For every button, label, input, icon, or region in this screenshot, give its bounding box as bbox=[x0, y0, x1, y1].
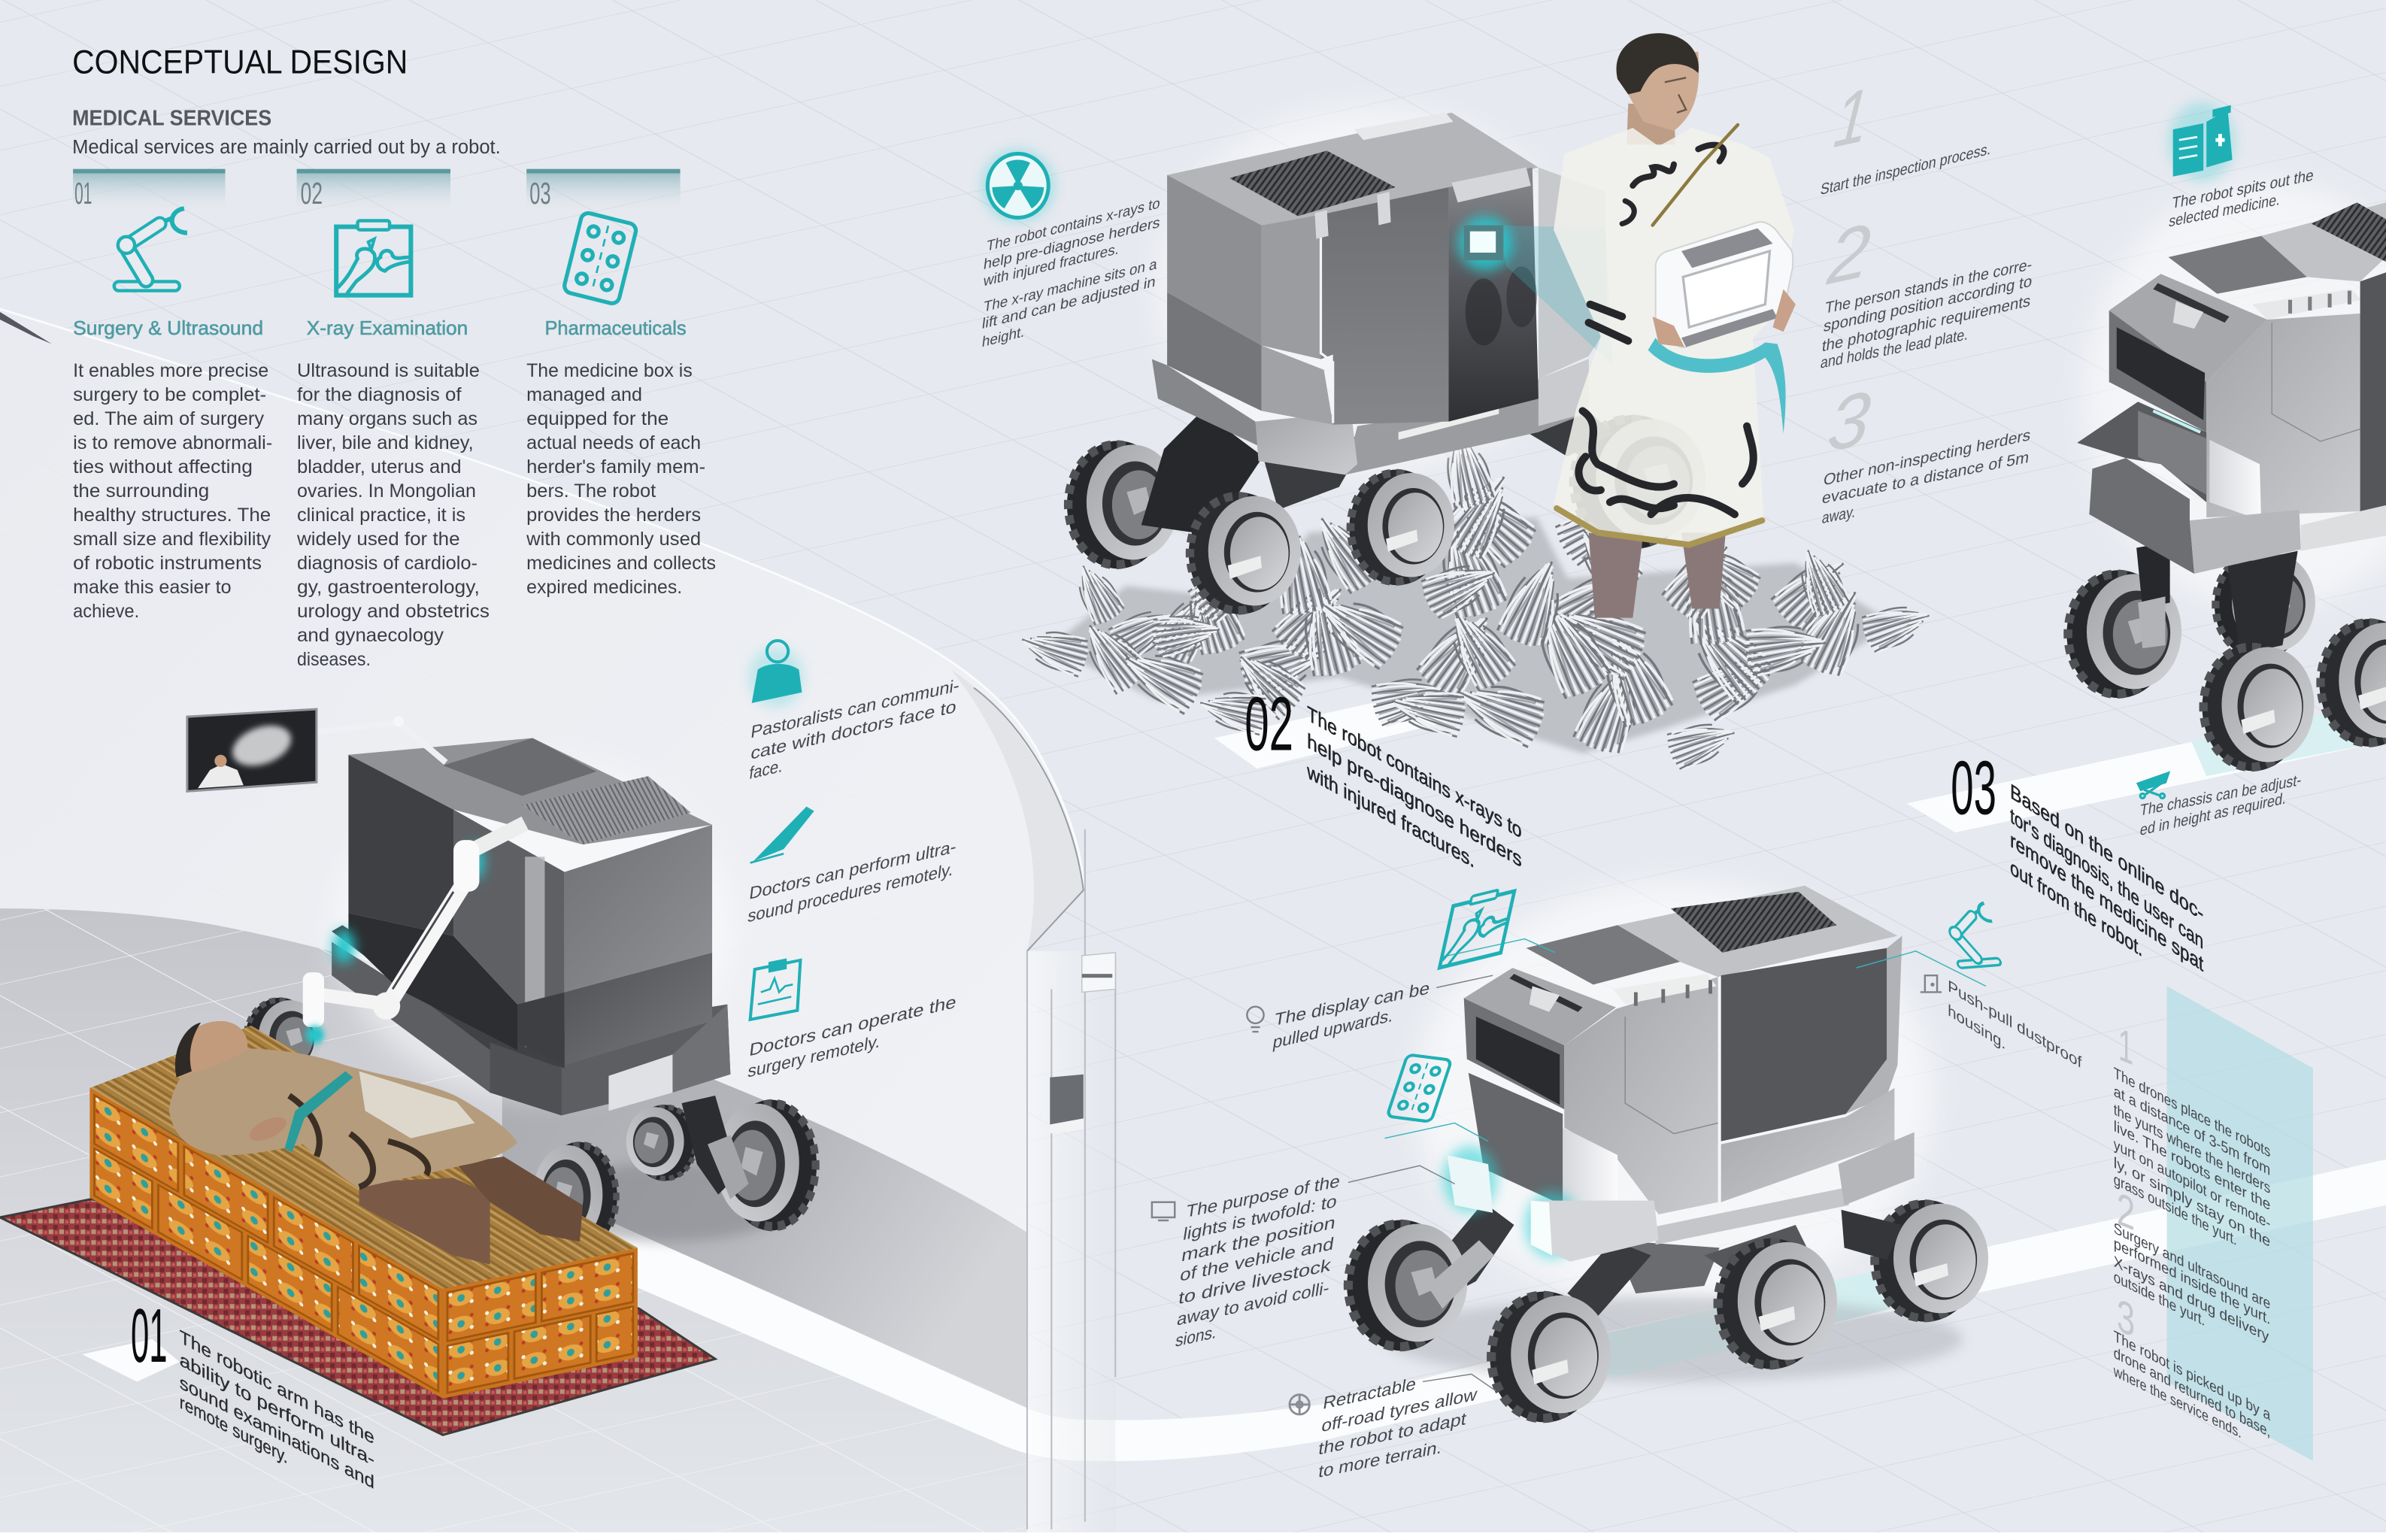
text block: x-ray: diseases. bbox=[297, 649, 371, 670]
chassis bbox=[1152, 359, 1589, 474]
number bar 01 bbox=[73, 169, 225, 213]
numeral 3: 3 bbox=[2117, 1290, 2135, 1348]
text block: pharmaceuticals: expired medicines. bbox=[526, 577, 682, 598]
text block: surgery: small size and flexibility bbox=[73, 529, 271, 550]
note: ultrasound remotely: sound procedures remotely. bbox=[747, 860, 954, 926]
patient bbox=[169, 1021, 583, 1265]
note: chassis height: ed in height as required. bbox=[2139, 789, 2287, 839]
service step 2: Surgery and ultrasound are bbox=[2114, 1219, 2270, 1313]
title: CONCEPTUAL DESIGN bbox=[72, 44, 408, 81]
x-ray glow and beam bbox=[1458, 216, 1613, 365]
icon: medicine bottles bbox=[2169, 102, 2236, 181]
step 03 description: Based on the online doc- bbox=[2010, 780, 2203, 926]
step 02 numeral: 02 bbox=[1245, 682, 1293, 767]
note: lights: The purpose of the bbox=[1184, 1172, 1342, 1222]
step 03 description: tor's diagnosis, the user can bbox=[2010, 804, 2203, 954]
note: x-ray function: height. bbox=[981, 324, 1026, 350]
icon: radiation bbox=[981, 149, 1054, 223]
text block: surgery: ed. The aim of surgery bbox=[73, 408, 265, 429]
step 03 description: out from the robot. bbox=[2010, 856, 2142, 962]
service step 1: at a distance of 3-5m from bbox=[2114, 1082, 2270, 1179]
bed left face bbox=[89, 1088, 443, 1399]
body bbox=[348, 738, 712, 1066]
service step 1: grass outside the yurt. bbox=[2114, 1171, 2237, 1249]
robot 4: exterior detail robot bbox=[1347, 883, 1988, 1423]
teal tint on path under robot bbox=[1567, 1250, 1963, 1378]
panel: teal glass service steps bbox=[2113, 986, 2313, 1461]
body bbox=[1167, 113, 1607, 425]
lead plate bbox=[1656, 222, 1793, 347]
step 01 description: sound examinations and bbox=[180, 1372, 374, 1493]
wheels and struts bbox=[1347, 1200, 1988, 1423]
note: communicate with doctors bbox=[748, 676, 960, 784]
glass sheet bbox=[2167, 986, 2313, 1461]
note: lights: lights is twofold: to bbox=[1181, 1192, 1339, 1244]
carpet bbox=[0, 1199, 715, 1435]
dome interior bbox=[0, 309, 1084, 1532]
text block: surgery: healthy structures. The bbox=[73, 505, 271, 526]
grass patch around robot 2 bbox=[1017, 429, 1935, 772]
number bar 02: 02 bbox=[301, 176, 323, 211]
icon: pill blister bbox=[563, 211, 638, 305]
service step 1: ly, or simply stay on the bbox=[2114, 1153, 2270, 1250]
note: x-ray function bbox=[981, 196, 1161, 350]
note: lights: of the vehicle and bbox=[1178, 1235, 1335, 1286]
text block: x-ray: many organs such as bbox=[297, 408, 478, 429]
text block: pharmaceuticals: herder's family mem- bbox=[526, 456, 705, 477]
service step 1: yurt on autopilot or remote- bbox=[2114, 1135, 2270, 1232]
step 01 description: The robotic arm has the bbox=[180, 1326, 374, 1448]
text block: x-ray: widely used for the bbox=[296, 529, 460, 550]
wheels and struts bbox=[1067, 411, 1705, 614]
text block: pharmaceuticals bbox=[526, 360, 716, 598]
text block: surgery: ties without affecting bbox=[73, 456, 253, 477]
heading: x-ray: X-ray Examination bbox=[307, 318, 468, 339]
note: x-ray function: lift and can be adjusted in bbox=[981, 274, 1157, 332]
service step 2: outside the yurt. bbox=[2114, 1268, 2205, 1329]
note: spits medicine: The robot spits out the bbox=[2171, 166, 2315, 212]
step note 1: Start the inspection process. bbox=[1820, 139, 1992, 199]
number bar 01: 01 bbox=[74, 176, 92, 211]
robot 4 feature notes bbox=[1152, 886, 2082, 1482]
bumpers with teal lights bbox=[1442, 1132, 1915, 1262]
wheels bbox=[245, 998, 817, 1251]
text block: pharmaceuticals: The medicine box is bbox=[526, 360, 693, 381]
wheels and struts bbox=[2066, 541, 2386, 771]
text block: x-ray: and gynaecology bbox=[297, 625, 444, 646]
text block: x-ray: Ultrasound is suitable bbox=[297, 360, 480, 381]
service step 2: performed inside the yurt. bbox=[2114, 1234, 2270, 1328]
person holding lead plate bbox=[1554, 33, 1796, 618]
note: chassis height: The chassis can be adjust- bbox=[2139, 771, 2303, 820]
chassis bbox=[332, 925, 730, 1115]
panel: pharmaceuticals bbox=[526, 169, 716, 598]
step note 3 bbox=[1821, 425, 2032, 527]
hands bbox=[1653, 290, 1796, 347]
note: display: The display can be bbox=[1273, 979, 1431, 1030]
note: communicate with doctors: Pastoralists can communi- bbox=[750, 676, 960, 742]
note: lights: mark the position bbox=[1180, 1213, 1337, 1266]
robot 3: medicine robot bbox=[2066, 183, 2386, 771]
robot 1 feature notes: 01 bbox=[131, 1293, 168, 1378]
text block: surgery: make this easier to bbox=[73, 577, 232, 598]
note: x-ray function: with injured fractures. bbox=[982, 241, 1120, 290]
teal glow on body bbox=[333, 929, 354, 963]
step 01 description: remote surgery. bbox=[180, 1392, 287, 1468]
note: display: pulled upwards. bbox=[1272, 1006, 1395, 1053]
note: ultrasound remotely: Doctors can perform ultra- bbox=[748, 838, 957, 904]
note: lights: to drive livestock bbox=[1177, 1256, 1332, 1308]
icon: pill blister small bbox=[1387, 1054, 1451, 1122]
step note 2: the photographic requirements bbox=[1821, 291, 2032, 355]
step 02 description: The robot contains x-rays to bbox=[1307, 702, 1522, 844]
note: tyres bbox=[1317, 1375, 1479, 1482]
robotic arm bbox=[303, 823, 525, 1044]
step 03 numeral: 03 bbox=[1951, 746, 1996, 831]
intro sentence: Medical services are mainly carried out by a robot. bbox=[72, 137, 501, 158]
text block: surgery bbox=[73, 360, 272, 622]
text block: x-ray: ovaries. In Mongolian bbox=[297, 480, 476, 502]
robe bbox=[1554, 128, 1794, 547]
glass wall of dome bbox=[1027, 829, 1115, 1532]
step 01 description: ability to perform ultra- bbox=[180, 1350, 374, 1471]
text block: x-ray: for the diagnosis of bbox=[297, 384, 462, 405]
subtitle: MEDICAL SERVICES bbox=[72, 107, 271, 131]
step note 2 bbox=[1820, 255, 2033, 372]
text block: x-ray: diagnosis of cardiolo- bbox=[297, 553, 478, 574]
text block: x-ray: liver, bile and kidney, bbox=[297, 432, 474, 453]
bed right face bbox=[443, 1247, 638, 1399]
note: spits medicine bbox=[2168, 166, 2315, 231]
note: tyres: to more terrain. bbox=[1317, 1438, 1443, 1482]
step note 2: and holds the lead plate. bbox=[1820, 326, 1969, 372]
text block: surgery: surgery to be complet- bbox=[73, 384, 266, 405]
numeral 2: 2 bbox=[2117, 1183, 2135, 1241]
text block: pharmaceuticals: bers. The robot bbox=[526, 480, 656, 502]
note: surgery remotely: Doctors can operate the bbox=[748, 993, 957, 1060]
step numeral 1: 1 bbox=[1830, 71, 1872, 164]
note: lights: sions. bbox=[1174, 1323, 1218, 1351]
note: tyres: Retractable bbox=[1322, 1375, 1417, 1414]
white floor path band bbox=[601, 1160, 2386, 1461]
icon: doctor bbox=[749, 641, 803, 708]
step numeral 3: 3 bbox=[1824, 374, 1874, 468]
text block: x-ray: clinical practice, it is bbox=[297, 505, 465, 526]
step numeral 2: 2 bbox=[1824, 207, 1874, 301]
icon: x-ray film small bbox=[1439, 886, 1516, 968]
note: dustproof housing: housing. bbox=[1948, 1000, 2006, 1053]
robe patterns bbox=[1557, 125, 1781, 545]
text block: pharmaceuticals: managed and bbox=[526, 384, 642, 405]
note: lights bbox=[1174, 1172, 1342, 1351]
service step 3: The robot is picked up by a bbox=[2114, 1327, 2270, 1424]
robot 2 feature notes bbox=[981, 71, 2033, 873]
text block: surgery: is to remove abnormali- bbox=[73, 432, 272, 453]
medicine hopper bbox=[2077, 402, 2206, 502]
icon: light bulb bbox=[1247, 1007, 1264, 1032]
number bar 02 bbox=[297, 169, 450, 213]
note: surgery remotely bbox=[747, 993, 957, 1082]
service step 3: where the service ends. bbox=[2113, 1362, 2242, 1441]
text block: pharmaceuticals: actual needs of each bbox=[526, 432, 701, 453]
service step 1: The drones place the robots bbox=[2114, 1064, 2270, 1161]
bed and carpet with patient bbox=[0, 1021, 715, 1435]
step 02 description: help pre-diagnose herders bbox=[1307, 729, 1522, 872]
text block: x-ray: urology and obstetrics bbox=[297, 601, 490, 622]
text block: surgery: It enables more precise bbox=[73, 360, 268, 381]
icon: door bbox=[1921, 975, 1942, 992]
teal sash bbox=[1648, 338, 1786, 434]
note: communicate with doctors: face. bbox=[748, 756, 784, 784]
service step 1: live. The robots enter the bbox=[2114, 1117, 2270, 1214]
panel: x-ray examination bbox=[296, 169, 490, 670]
service step 3: drone and returned to base, bbox=[2114, 1344, 2270, 1441]
heading: pharmaceuticals: Pharmaceuticals bbox=[544, 318, 687, 339]
robot 2: x-ray robot bbox=[1067, 107, 1705, 614]
text block: x-ray bbox=[296, 360, 490, 670]
grey floor disc bbox=[0, 908, 1027, 1532]
service step 1: the yurts where the herders bbox=[2114, 1100, 2270, 1197]
step note 3: away. bbox=[1821, 503, 1857, 527]
text block: surgery: the surrounding bbox=[73, 480, 209, 502]
numeral 1: 1 bbox=[2118, 1019, 2133, 1075]
heading: surgery: Surgery & Ultrasound bbox=[73, 318, 263, 339]
text block: pharmaceuticals: with commonly used bbox=[526, 529, 701, 550]
legs bbox=[1589, 532, 1726, 618]
robot 1 feature notes bbox=[131, 641, 960, 1493]
number bar 03: 03 bbox=[529, 176, 551, 211]
neck and face bbox=[1627, 52, 1699, 144]
service step 2: X-rays and drug delivery bbox=[2114, 1253, 2269, 1346]
leader lines bbox=[1348, 939, 1986, 1391]
hair bbox=[1617, 33, 1699, 95]
text block: pharmaceuticals: provides the herders bbox=[526, 505, 701, 526]
number bar 03 bbox=[526, 169, 681, 213]
step note 2: The person stands in the corre- bbox=[1824, 255, 2033, 317]
icon: robot arm small bbox=[1939, 903, 2006, 968]
step note 2: sponding position according to bbox=[1823, 271, 2033, 335]
step 02 description: with injured fractures. bbox=[1306, 759, 1475, 873]
text block: pharmaceuticals: medicines and collects bbox=[526, 553, 716, 574]
icon: scalpel bbox=[750, 807, 814, 862]
note: x-ray function: The x-ray machine sits on a bbox=[983, 256, 1159, 316]
note: lights: away to avoid colli- bbox=[1175, 1278, 1331, 1330]
step 03 description: remove the medicine spat bbox=[2010, 829, 2204, 977]
chassis beam bbox=[1656, 1187, 1849, 1244]
note: x-ray function: The robot contains x-rays to bbox=[986, 196, 1161, 255]
robot 1: surgery robot bbox=[187, 709, 817, 1251]
bumper bbox=[2089, 458, 2386, 574]
body bbox=[2109, 202, 2386, 520]
text block: pharmaceuticals: equipped for the bbox=[526, 408, 669, 429]
body bbox=[1464, 886, 1902, 1214]
text block: x-ray: gy, gastroenterology, bbox=[297, 577, 480, 598]
step note 3: evacuate to a distance of 5m bbox=[1821, 448, 2030, 508]
icon: clipboard bbox=[750, 960, 800, 1020]
note: spits medicine: selected medicine. bbox=[2168, 190, 2281, 231]
monitor with ultrasound scan bbox=[187, 709, 446, 791]
note: x-ray function: help pre-diagnose herders bbox=[983, 214, 1161, 273]
icon: x-ray film bbox=[336, 220, 411, 296]
icon: tyre bbox=[1290, 1395, 1309, 1414]
heading block bbox=[72, 44, 501, 158]
text block: surgery: of robotic instruments bbox=[73, 553, 262, 574]
white label strips bbox=[82, 684, 2386, 1381]
text block: surgery: achieve. bbox=[73, 601, 139, 622]
note: tyres: off-road tyres allow bbox=[1320, 1385, 1479, 1436]
service step 1 bbox=[2114, 1064, 2270, 1250]
note: display bbox=[1272, 979, 1431, 1053]
robot 3 feature notes bbox=[1951, 102, 2315, 977]
step note 3: Other non-inspecting herders bbox=[1823, 425, 2032, 490]
bed top bbox=[89, 1026, 638, 1289]
text block: x-ray: bladder, uterus and bbox=[297, 456, 462, 477]
note: communicate with doctors: cate with doctors face to bbox=[750, 697, 957, 764]
panel: surgery and ultrasound bbox=[73, 169, 272, 622]
note: dustproof housing: Push-pull dustproof bbox=[1948, 976, 2082, 1072]
icon: stretcher bbox=[2138, 773, 2169, 798]
note: surgery remotely: surgery remotely. bbox=[747, 1032, 881, 1082]
note: tyres: the robot to adapt bbox=[1317, 1409, 1468, 1460]
icon: robot arm bbox=[114, 208, 187, 291]
icon: monitor bbox=[1152, 1202, 1175, 1220]
